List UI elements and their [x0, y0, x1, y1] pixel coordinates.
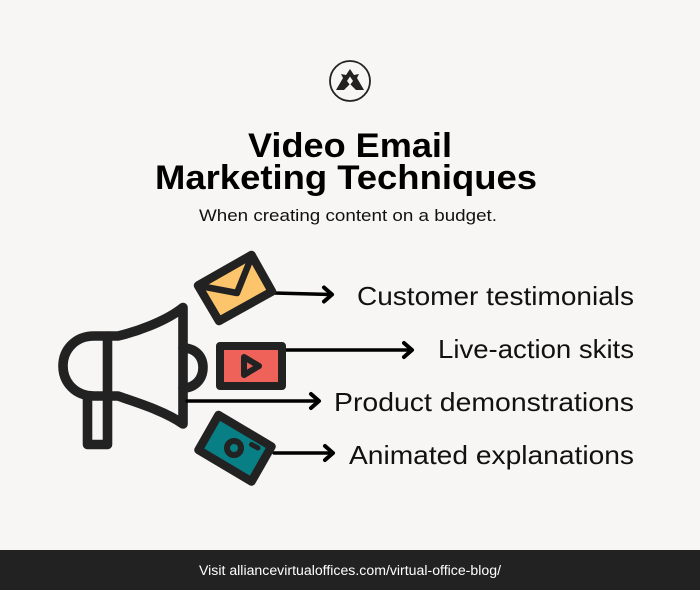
logo: [330, 61, 370, 101]
icon: megaphone: [63, 308, 203, 444]
title: Video Email: [248, 127, 452, 165]
footer bar: [0, 550, 700, 590]
title: [155, 127, 537, 197]
arrow: testimonials: [274, 288, 332, 302]
label: live-action skits: Live-action skits: [438, 334, 634, 364]
icon: video player: [220, 346, 282, 386]
subtitle: When creating content on a budget.: [199, 206, 497, 225]
label: animated explanations: Animated explanations: [349, 440, 634, 470]
arrow: demonstrations: [187, 394, 319, 408]
footer link text: Visit alliancevirtualoffices.com/virtual-office-blog/: [199, 563, 501, 578]
label: product demonstrations: Product demonstrations: [334, 387, 634, 417]
icon: camera: [198, 415, 272, 482]
arrow: skits: [286, 343, 412, 357]
label: customer testimonials: Customer testimonials: [357, 281, 634, 311]
icon: envelope: [198, 255, 272, 321]
title: Marketing Techniques: [155, 159, 537, 197]
arrow: animated: [274, 446, 333, 460]
